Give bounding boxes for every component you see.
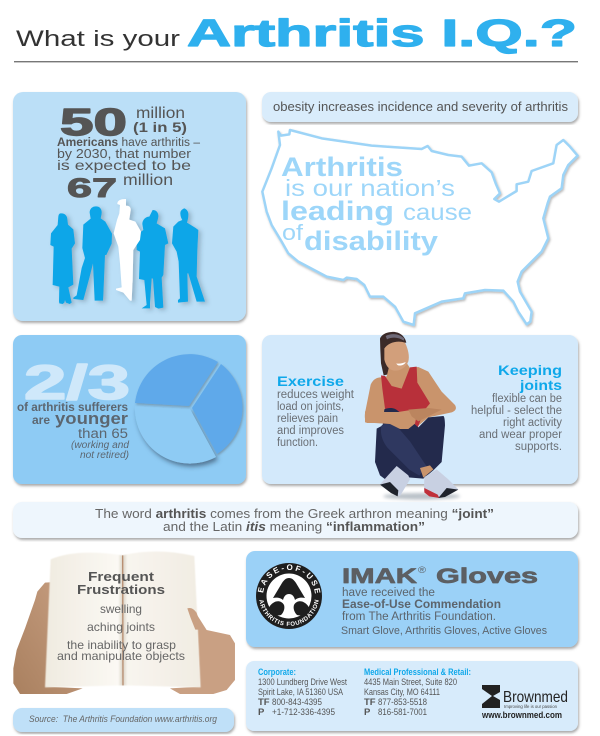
- text: frustrations list: the inability to grasp: [67, 638, 176, 652]
- statistic text: 50 million: 67: [67, 173, 117, 203]
- headband: [386, 334, 404, 341]
- heading: IMAK gloves: [342, 564, 538, 588]
- icon: ease-of-use badge: ARTHRITIS FOUNDATION: [259, 600, 319, 626]
- text: exercise: [277, 374, 355, 449]
- text: commendation: have received the: [342, 587, 435, 599]
- text: frustrations list: swelling: [100, 602, 142, 616]
- map headline text: [281, 152, 472, 256]
- text: keeping joints: and wear proper: [479, 429, 562, 441]
- text: medical and retail address: Kansas City, MO 64111: [364, 687, 440, 698]
- pie chart: [135, 354, 242, 464]
- panel: obesity strip: obesity increases incidence and severity of arthritis: [273, 99, 568, 114]
- map headline text: is our nation’s: [285, 175, 455, 201]
- map headline text: disability: [304, 226, 438, 256]
- text: exercise: Exercise: [277, 374, 345, 389]
- panel: contact details: [246, 661, 578, 731]
- icon: US map outline: [262, 130, 578, 325]
- text: medical and retail address: P: [364, 707, 371, 718]
- text: medical and retail address: TF: [364, 697, 376, 708]
- text: medical and retail address: [364, 667, 471, 718]
- text: keeping joints: joints: [519, 378, 562, 393]
- text: commendation: Smart Glove, Arthritis Gloves, Active Gloves: [341, 625, 547, 637]
- text: medical and retail address: Medical Professional & Retail:: [364, 667, 471, 678]
- map headline text: cause: [403, 199, 472, 225]
- text: corporate address: P: [258, 707, 265, 718]
- text: medical and retail address: 877-853-5518: [378, 697, 427, 708]
- title: [14, 13, 578, 62]
- text: corporate address: 1300 Lundberg Drive West: [258, 677, 347, 688]
- smile: [396, 362, 406, 366]
- statistic text: 50 million: 50: [60, 102, 127, 144]
- icon: ease-of-use badge: EASE-OF-USE: [258, 564, 320, 594]
- panel: obesity strip: [262, 92, 578, 122]
- text: keeping joints: right activity: [503, 417, 562, 429]
- text: corporate address: Spirit Lake, IA 51360 USA: [258, 687, 344, 698]
- hair: [380, 332, 406, 375]
- text: exercise: relieves pain: [277, 413, 338, 425]
- panel: 50 million Americans: [13, 92, 246, 321]
- text: exercise: function.: [277, 437, 318, 449]
- statistic text: 50 million: [57, 102, 201, 203]
- map headline text: leading: [281, 196, 394, 226]
- neck and shoulders: [365, 363, 456, 426]
- text: commendation: [341, 587, 547, 637]
- right shoe: [424, 469, 458, 497]
- clasped hands and forearms: [365, 410, 417, 429]
- text: corporate address: 800-843-4395: [272, 697, 322, 708]
- text: sufferers description: not retired): [80, 450, 129, 461]
- text: keeping joints: helpful - select the: [471, 405, 562, 417]
- text: sufferers description: [17, 402, 129, 461]
- map headline text: Arthritis: [281, 152, 403, 182]
- text: medical and retail address: 4435 Main Street, Suite 820: [364, 677, 457, 688]
- left shoe: [380, 466, 410, 496]
- text: corporate address: [258, 667, 347, 718]
- title: What is your: [16, 26, 181, 51]
- text: sufferers description: of arthritis sufferers: [17, 402, 128, 414]
- statistic text: 50 million: million: [123, 172, 173, 189]
- source note: [13, 708, 234, 732]
- illustration: hands holding book: [13, 551, 235, 694]
- illustration: seated woman: [365, 332, 460, 500]
- icon: ease-of-use badge: [256, 563, 322, 629]
- face: [384, 342, 409, 371]
- text: medical and retail address: 816-581-7001: [378, 707, 427, 718]
- title: Arthritis I.Q.?: [187, 13, 577, 55]
- ankle: [420, 465, 433, 478]
- panel: word origin strip: and the Latin itis meaning “inflammation”: [163, 519, 425, 534]
- text: frustrations list: and manipulate objects: [57, 649, 185, 663]
- logo: Brownmed: [481, 685, 568, 720]
- text: frustrations list: Frustrations: [77, 582, 165, 597]
- heading: IMAK gloves: Gloves: [436, 564, 538, 588]
- statistic text: 50 million: (1 in 5): [133, 119, 187, 135]
- text: corporate address: Corporate:: [258, 667, 296, 678]
- text: keeping joints: supports.: [515, 441, 562, 453]
- panel: word origin strip: The word arthritis comes from the Greek arthron meaning “joint”: [95, 506, 494, 521]
- text: exercise: and improves: [277, 425, 344, 437]
- logo: Brownmed: Improving life is our passion: [504, 704, 557, 709]
- text: commendation: from The Arthritis Foundation.: [342, 611, 496, 623]
- text: keeping joints: flexible can be: [492, 393, 562, 405]
- map headline text: of: [282, 220, 304, 245]
- text: exercise: reduces weight: [277, 389, 355, 401]
- panel: word origin strip: [13, 502, 578, 538]
- navy leggings: [375, 408, 445, 480]
- text: commendation: Ease-of-Use Commendation: [342, 599, 501, 611]
- panel: book with frequent frustrations: [13, 551, 235, 694]
- panel: exercise and keeping joints: [262, 332, 578, 500]
- statistic text: 2/3: 2/3: [24, 357, 130, 410]
- statistic text: 50 million: by 2030, that number: [57, 147, 191, 161]
- heading: IMAK gloves: ®: [418, 565, 426, 575]
- text: frustrations list: [57, 569, 185, 663]
- source note: Source: The Arthritis Foundation www.arthritis.org: [29, 714, 218, 725]
- text: corporate address: TF: [258, 697, 270, 708]
- text: frustrations list: Frequent: [88, 569, 155, 584]
- statistic text: 50 million: is expected to be: [57, 157, 191, 173]
- text: sufferers description: younger: [55, 409, 128, 428]
- text: frustrations list: aching joints: [87, 620, 155, 634]
- panel: US map with leading cause text: [262, 130, 578, 325]
- heading: IMAK gloves: IMAK: [342, 564, 418, 588]
- text: corporate address: +1-712-336-4395: [272, 707, 335, 718]
- text: sufferers description: than 65: [78, 426, 128, 441]
- panel: IMAK gloves: [246, 551, 580, 650]
- logo: Brownmed: Brownmed: [503, 689, 568, 706]
- text: exercise: load on joints,: [277, 401, 344, 413]
- icon: group of five people silhouettes: [50, 199, 205, 309]
- red tank top: [381, 367, 430, 440]
- text: sufferers description: (working and: [71, 440, 129, 451]
- statistic text: 50 million: Americans have arthritis –: [57, 137, 201, 149]
- statistic text: 50 million: million: [136, 105, 185, 122]
- text: keeping joints: Keeping: [498, 363, 562, 378]
- panel: 2/3 younger than 65: [13, 335, 246, 484]
- text: keeping joints: [471, 363, 562, 453]
- text: sufferers description: are: [32, 415, 50, 427]
- logo: Brownmed: www.brownmed.com: [481, 710, 562, 720]
